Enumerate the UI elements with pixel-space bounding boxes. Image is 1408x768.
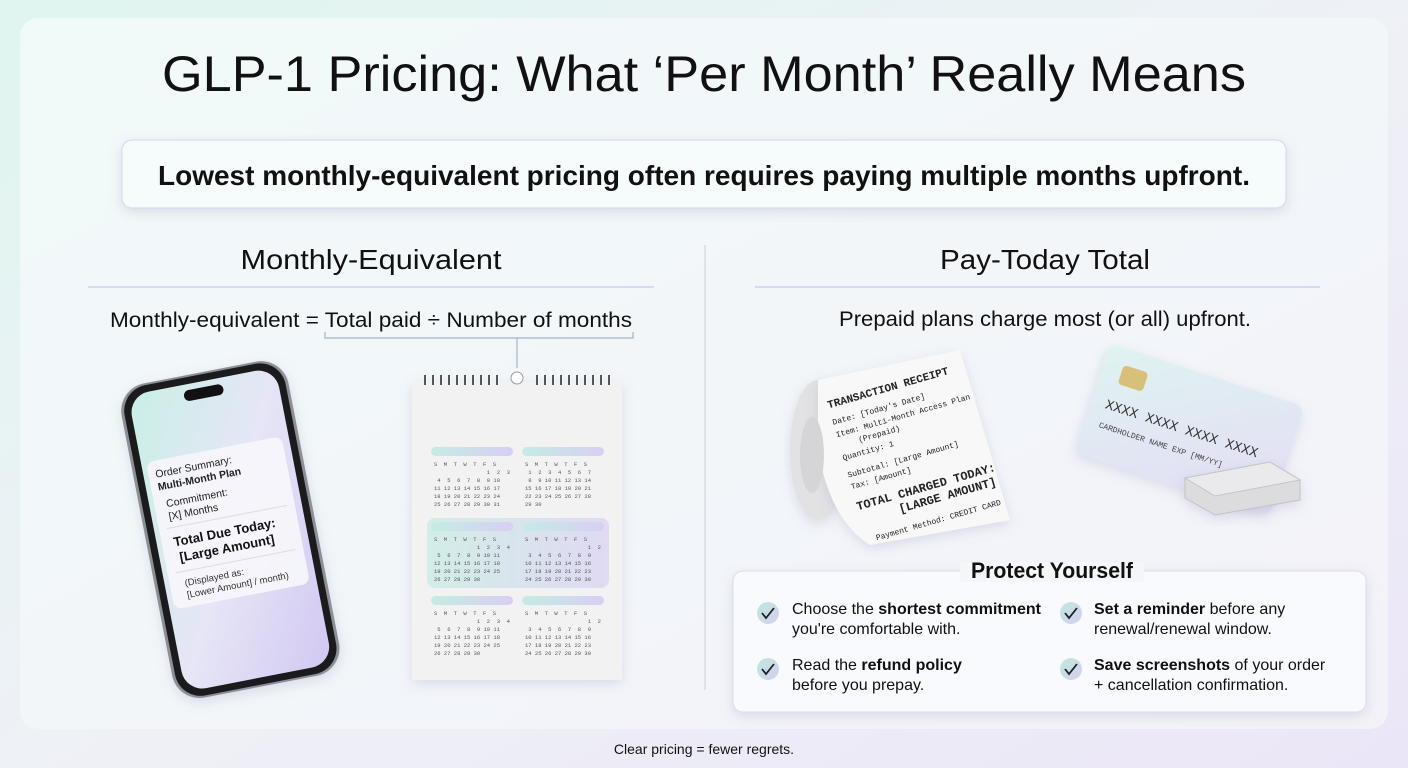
tip 3	[757, 657, 962, 694]
tip 3: before you prepay.	[792, 677, 924, 694]
calendar: 22 23 24 25 26 27 28	[525, 493, 591, 500]
calendar: SMTWTFS	[525, 461, 594, 468]
calendar: 1 2 3 4 5 6 7	[525, 469, 591, 476]
credit card and reader	[1074, 343, 1305, 516]
calendar: 3 4 5 6 7 8 9	[525, 552, 591, 559]
calendar: 10 11 12 13 14 15 16	[525, 634, 591, 641]
tip 4: Save screenshots of your order	[1094, 657, 1326, 674]
caption: Prepaid plans charge most (or all) upfront.	[839, 308, 1251, 331]
credit card and reader: XXXX XXXX XXXX XXXX	[1103, 398, 1260, 462]
receipt roll: Date: [Today's Date]	[832, 393, 926, 428]
calendar: 1 2 3 4	[434, 618, 511, 625]
panel: pay-today total	[614, 244, 1366, 757]
receipt roll: (Prepaid)	[857, 425, 901, 445]
panel: monthly-equivalent	[88, 244, 654, 703]
bracket	[325, 332, 633, 368]
calendar: SMTWTFS	[434, 536, 503, 543]
calendar: 1 2	[525, 618, 601, 625]
title: GLP-1 Pricing: What ‘Per Month’ Really Means	[162, 46, 1246, 102]
calendar: 1 2 3	[434, 469, 510, 476]
calendar: 11 12 13 14 15 16 17	[434, 485, 500, 492]
receipt roll: Quantity: 1	[842, 440, 895, 463]
heading: monthly-equivalent: Monthly-Equivalent	[240, 244, 502, 275]
calendar	[412, 372, 622, 680]
tip 2	[1060, 601, 1285, 638]
calendar: 17 18 19 20 21 22 23	[525, 642, 591, 649]
tip 1: Choose the shortest commitment	[792, 601, 1042, 618]
calendar: 5 6 7 8 9 10 11	[434, 626, 501, 633]
order summary card: [Lower Amount] / month)	[186, 570, 290, 601]
tip 2: Set a reminder before any	[1094, 601, 1285, 618]
receipt roll: Payment Method: CREDIT CARD	[875, 499, 1002, 543]
calendar: 1 2	[525, 544, 601, 551]
order summary card: Commitment:	[165, 487, 229, 510]
calendar: SMTWTFS	[525, 536, 594, 543]
calendar: 19 20 21 22 23 24 25	[434, 568, 500, 575]
receipt roll: Tax: [Amount]	[850, 466, 913, 492]
calendar: 4 5 6 7 8 9 10	[434, 477, 500, 484]
calendar: SMTWTFS	[434, 461, 503, 468]
receipt roll	[790, 350, 1010, 546]
calendar: 1 2 3 4	[434, 544, 511, 551]
calendar: 17 18 19 20 21 22 23	[525, 568, 591, 575]
calendar: SMTWTFS	[525, 610, 594, 617]
calendar: 18 19 20 21 22 23 24	[434, 493, 501, 500]
vertical divider	[704, 245, 706, 690]
calendar: 25 26 27 28 29 30 31	[434, 501, 501, 508]
order summary card: Total Due Today:	[172, 515, 277, 549]
tip 1: you're comfortable with.	[792, 621, 960, 638]
tip 4	[1060, 657, 1326, 694]
receipt roll: Item: Multi-Month Access Plan	[835, 393, 972, 440]
calendar: 12 13 14 15 16 17 18	[434, 560, 500, 567]
subtitle banner: Lowest monthly-equivalent pricing often requires paying multiple months upfront.	[158, 160, 1250, 191]
calendar: 12 13 14 15 16 17 18	[434, 634, 500, 641]
calendar: 24 25 26 27 28 29 30	[525, 650, 591, 657]
calendar: SMTWTFS	[434, 610, 503, 617]
tip 3: Read the refund policy	[792, 657, 962, 674]
heading: protect yourself: Protect Yourself	[971, 558, 1134, 583]
tip 4: + cancellation confirmation.	[1094, 677, 1288, 694]
calendar: 24 25 26 27 28 29 30	[525, 576, 591, 583]
order summary card: Multi-Month Plan	[157, 466, 242, 494]
calendar: 8 9 10 11 12 13 14	[525, 477, 592, 484]
tip 1	[757, 601, 1042, 638]
calendar: 10 11 12 13 14 15 16	[525, 560, 591, 567]
subtitle banner	[122, 140, 1286, 208]
phone	[116, 356, 344, 703]
footer: Clear pricing = fewer regrets.	[614, 741, 794, 757]
calendar: 5 6 7 8 9 10 11	[434, 552, 501, 559]
tip 2: renewal/renewal window.	[1094, 621, 1272, 638]
calendar: 19 20 21 22 23 24 25	[434, 642, 500, 649]
receipt roll: TRANSACTION RECEIPT	[826, 366, 951, 412]
receipt roll: Subtotal: [Large Amount]	[847, 440, 960, 481]
order summary card: [X] Months	[168, 502, 219, 523]
calendar: 3 4 5 6 7 8 9	[525, 626, 591, 633]
calendar: 15 16 17 18 19 20 21	[525, 485, 592, 492]
credit card and reader: CARDHOLDER NAME EXP [MM/YY]	[1097, 421, 1223, 470]
calendar: 26 27 28 29 30	[434, 576, 480, 583]
order summary card: [Large Amount]	[178, 532, 276, 565]
formula: Monthly-equivalent = Total paid ÷ Number of months	[110, 309, 632, 332]
panel: protect yourself	[733, 558, 1366, 712]
order summary card: (Displayed as:	[184, 567, 245, 589]
calendar: 26 27 28 29 30	[434, 650, 480, 657]
order summary card	[146, 436, 310, 610]
order summary card: Order Summary:	[154, 454, 233, 481]
calendar: 29 30	[525, 501, 542, 508]
receipt roll: TOTAL CHARGED TODAY:	[855, 461, 997, 514]
heading: pay-today total: Pay-Today Total	[940, 244, 1150, 275]
receipt roll: [LARGE AMOUNT]	[897, 475, 998, 517]
